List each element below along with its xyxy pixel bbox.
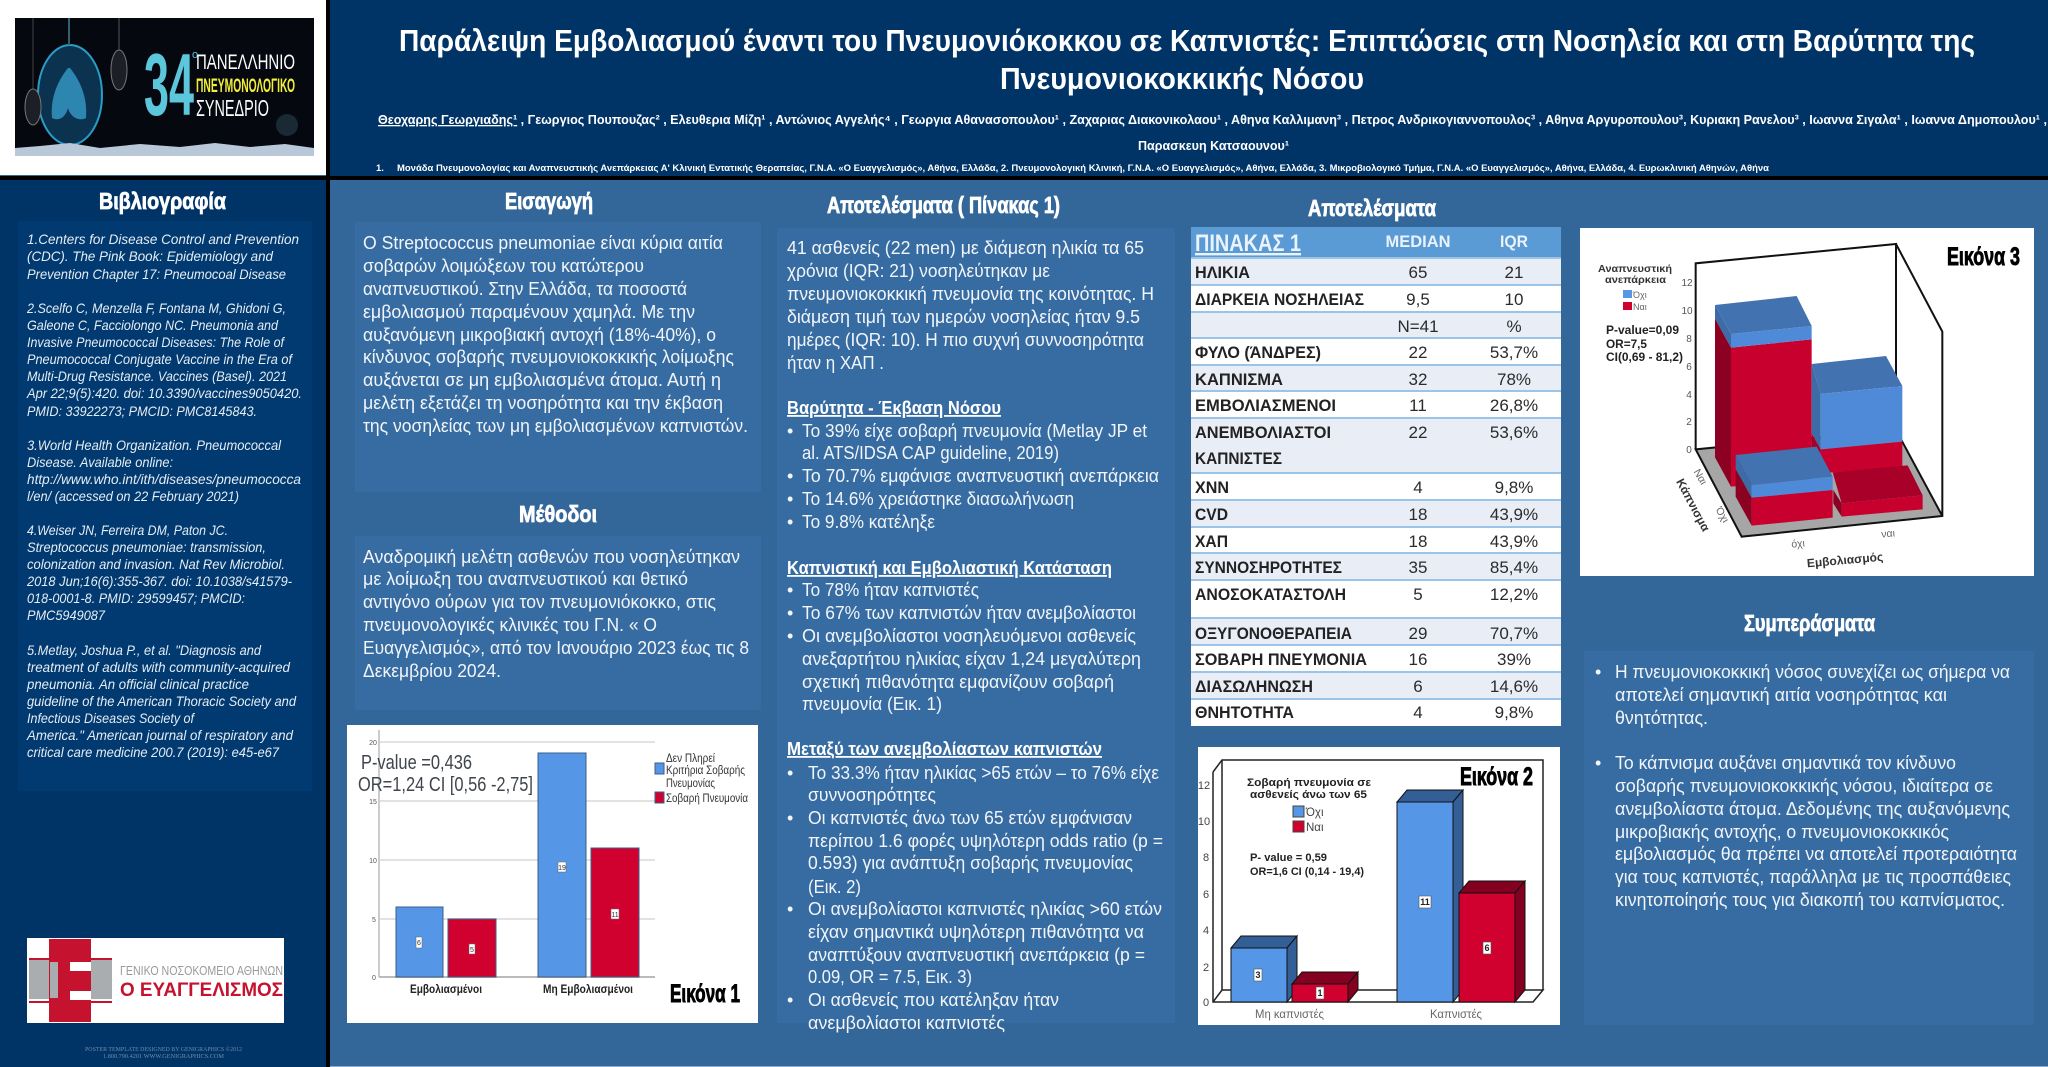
- chart: figure 1: [347, 725, 758, 1023]
- table row labels: ΑΝΕΜΒΟΛΙΑΣΤΟΙ: [1195, 423, 1331, 442]
- authors: [378, 112, 2047, 153]
- table row labels: ΧΝΝ: [1195, 478, 1229, 497]
- text: summary: διάμεση τιμή των ημερών νοσηλείας ήταν 9.5: [787, 307, 1140, 327]
- title: Πνευμονιοκοκκικής Νόσου: [1000, 61, 1364, 96]
- text: methods body: Αναδρομική μελέτη ασθενών που νοσηλεύτηκαν: [363, 547, 740, 567]
- text: references: Pneumococcal Conjugate Vaccine in the Era of: [27, 351, 294, 367]
- table row labels: ΟΞΥΓΟΝΟΘΕΡΑΠΕΙΑ: [1195, 624, 1352, 643]
- text: smoking and vaccination section: •: [787, 603, 793, 623]
- table median values: 22: [1409, 423, 1427, 442]
- table row labels: ΚΑΠΝΙΣΤΕΣ: [1195, 449, 1282, 468]
- text: references: colonization and invasion. Nat Rev Microbiol.: [27, 556, 285, 572]
- stats annotation: OR=1,24 CI [0,56 -2,75]: [358, 774, 533, 796]
- text: references: Galeone C, Facciolongo NC. Pneumonia and: [27, 317, 279, 333]
- text: summary: ήταν η ΧΑΠ .: [787, 353, 884, 373]
- heading: introduction: Εισαγωγή: [505, 188, 593, 214]
- text: unvaccinated smokers section: αναπτύξουν αναπνευστική ανεπάρκεια (p =: [808, 945, 1145, 965]
- text: smoking and vaccination section: ανεξαρτήτου ηλικίας είχαν 1,24 μεγαλύτερη: [802, 649, 1141, 669]
- stats annotation: [1250, 852, 1364, 878]
- stats annotation: P-value =0,436: [361, 752, 472, 774]
- chart: figure 1: 5: [372, 917, 376, 924]
- chart: figure 1: 11: [611, 912, 619, 919]
- text: smoking and vaccination section: πνευμονία (Εικ. 1): [802, 694, 942, 714]
- text: references: 2.Scelfo C, Menzella F, Fontana M, Ghidoni G,: [26, 300, 286, 316]
- text: unvaccinated smokers section: •: [787, 990, 793, 1010]
- footer credit: 1.800.790.4201 WWW.GENIGRAPHICS.COM: [103, 1053, 224, 1060]
- legend: ανεπάρκεια: [1605, 274, 1667, 286]
- text: unvaccinated smokers section: [787, 739, 1163, 1033]
- table row labels: ΗΛΙΚΙΑ: [1195, 263, 1250, 282]
- table iqr and percent values: 12,2%: [1490, 585, 1538, 604]
- text: introduction body: [363, 233, 748, 436]
- text: conclusions body: ανεμβολίαστα άτομα. Δεδομένης της αυξανόμενης: [1615, 799, 2010, 819]
- text: methods body: Ευαγγελισμός», από τον Ιανουάριο 2023 έως τις 8: [363, 638, 749, 658]
- text: conclusions body: θνητότητας.: [1615, 708, 1708, 728]
- table median values: [1397, 263, 1439, 722]
- table median values: 22: [1409, 343, 1427, 362]
- legend: [1293, 806, 1324, 834]
- 3d plot: [1696, 244, 1942, 537]
- text: introduction body: αυξανόμενη μικροβιακή αντοχή (18%-40%), ο: [363, 325, 716, 345]
- text: smoking and vaccination section: [787, 558, 1141, 714]
- panel: conclusions: [1584, 610, 2034, 1025]
- text: introduction body: κίνδυνος σοβαρής πνευμονιοκοκκικής λοίμωξης: [363, 347, 734, 367]
- legend: Σοβαρή Πνευμονία: [666, 791, 748, 805]
- footer credit: [85, 1046, 242, 1060]
- text: unvaccinated smokers section: •: [787, 808, 793, 828]
- title: [399, 23, 1975, 96]
- chart: figure 1: 15: [369, 799, 377, 806]
- text: severity section: •: [787, 421, 793, 441]
- conference logo: ΣΥΝΕΔΡΙΟ: [196, 95, 269, 121]
- table iqr and percent values: 10: [1505, 290, 1523, 309]
- stats annotation: P- value = 0,59: [1250, 852, 1327, 864]
- authors: Παρασκευη Κατσαουνου¹: [1138, 138, 1289, 153]
- text: references: Prevention Chapter 17: Pneumocoal Disease: [27, 266, 286, 282]
- conference logo: 34: [144, 35, 194, 134]
- text: smoking and vaccination section: Το 67% των καπνιστών ήταν ανεμβολίαστοι: [802, 603, 1136, 623]
- text: references: [26, 231, 302, 760]
- legend: Πνευμονίας: [666, 776, 715, 790]
- text: methods body: Δεκεμβρίου 2024.: [363, 661, 501, 681]
- chart: figure 3: 6: [1686, 362, 1692, 373]
- chart: figure 2: 1: [1317, 988, 1323, 998]
- table header: MEDIAN: [1386, 232, 1450, 251]
- chart: figure 3: [1580, 228, 2034, 576]
- table row labels: ΘΝΗΤΟΤΗΤΑ: [1195, 703, 1294, 722]
- text: references: PMC5949087: [27, 607, 106, 623]
- table median values: 4: [1413, 703, 1423, 722]
- table median values: 5: [1413, 585, 1423, 604]
- text: summary: πνευμονιοκοκκική πνευμονία της κοινότητας. Η: [787, 284, 1154, 304]
- figure label: Εικόνα 2: [1460, 763, 1533, 791]
- table median values: 65: [1409, 263, 1427, 282]
- text: references: Disease. Available online:: [27, 454, 173, 470]
- legend: Όχι: [1305, 807, 1324, 819]
- chart: figure 2: 12: [1198, 780, 1210, 792]
- table iqr and percent values: 39%: [1497, 650, 1531, 669]
- hospital logo: Ο ΕΥΑΓΓΕΛΙΣΜΟΣ: [120, 980, 283, 1001]
- table median values: 18: [1409, 505, 1427, 524]
- table row labels: ΑΝΟΣΟΚΑΤΑΣΤΟΛΗ: [1195, 585, 1346, 604]
- legend: Κριτήρια Σοβαρής: [666, 763, 745, 777]
- text: severity section: •: [787, 489, 793, 509]
- text: smoking and vaccination section: Οι ανεμβολίαστοι νοσηλευόμενοι ασθενείς: [802, 626, 1136, 646]
- table median values: 32: [1409, 370, 1427, 389]
- chart: figure 2: 3: [1255, 970, 1261, 980]
- category labels: [410, 982, 633, 996]
- text: unvaccinated smokers section: •: [787, 763, 793, 783]
- table median values: 35: [1409, 558, 1427, 577]
- category labels: Καπνιστές: [1430, 1007, 1482, 1021]
- category labels: [1255, 1007, 1482, 1021]
- affiliations: 1.: [376, 163, 384, 174]
- table header: IQR: [1500, 232, 1528, 251]
- chart: figure 2: 2: [1203, 962, 1209, 974]
- chart: figure 2: 0: [1203, 997, 1209, 1009]
- legend: Ναι: [1633, 302, 1647, 312]
- text: unvaccinated smokers section: ανεμβολίαστοι καπνιστές: [808, 1013, 1005, 1033]
- text: methods body: αντιγόνο ούρων για τον πνευμονιόκοκκο, στις: [363, 592, 716, 612]
- chart: figure 2: [1198, 747, 1560, 1025]
- table row labels: ΣΥΝΝΟΣΗΡΟΤΗΤΕΣ: [1195, 558, 1342, 577]
- table row labels: ΣΟΒΑΡΗ ΠΝΕΥΜΟΝΙΑ: [1195, 650, 1367, 669]
- text: introduction body: μελέτη εξετάζει τη νοσηρότητα και την έκβαση: [363, 393, 723, 413]
- chart: figure 1: 5: [470, 947, 474, 954]
- text: conclusions body: μικροβιακής αντοχής, ο πνευμονιοκοκκικός: [1615, 822, 1949, 842]
- text: introduction body: εμβολιασμού παραμένουν χαμηλά. Με την: [363, 302, 695, 322]
- text: unvaccinated smokers section: Οι καπνιστές άνω των 65 ετών εμφάνισαν: [808, 808, 1132, 828]
- text: smoking and vaccination section: Το 78% ήταν καπνιστές: [802, 580, 979, 600]
- table iqr and percent values: [1490, 263, 1538, 722]
- table median values: 16: [1409, 650, 1427, 669]
- axis labels: Εμβολιασμός: [1806, 550, 1884, 570]
- text: severity section: Βαρύτητα - Έκβαση Νόσου: [787, 398, 1001, 418]
- text: references: 5.Metlay, Joshua P., et al. "Diagnosis and: [27, 642, 262, 658]
- table iqr and percent values: 53,7%: [1490, 343, 1538, 362]
- chart: figure 3: 4: [1686, 390, 1692, 401]
- text: introduction body: σοβαρών λοιμώξεων του κατώτερου: [363, 256, 644, 276]
- text: severity section: al. ATS/IDSA CAP guideline, 2019): [802, 443, 1059, 463]
- heading: conclusions: Συμπεράσματα: [1744, 610, 1875, 636]
- text: references: treatment of adults with community-acquired: [27, 659, 291, 675]
- chart frame: [1213, 760, 1543, 1002]
- table median values: 4: [1413, 478, 1423, 497]
- table iqr and percent values: 70,7%: [1490, 624, 1538, 643]
- text: smoking and vaccination section: •: [787, 580, 793, 600]
- text: references: Streptococcus pneumoniae: transmission,: [27, 539, 266, 555]
- chart title: [1247, 777, 1372, 801]
- table iqr and percent values: 43,9%: [1490, 505, 1538, 524]
- table iqr and percent values: 9,8%: [1495, 703, 1533, 722]
- table median values: 11: [1409, 396, 1427, 415]
- legend: Ναι: [1306, 822, 1324, 834]
- text: references: Apr 22;9(5):420. doi: 10.3390/vaccines9050420.: [26, 385, 302, 401]
- text: references: pneumonia. An official clinical practice: [26, 676, 249, 692]
- text: introduction body: αναπνευστικού. Στην Ελλάδα, τα ποσοστά: [363, 279, 687, 299]
- chart: figure 1: 6: [417, 940, 421, 947]
- text: conclusions body: •: [1595, 753, 1601, 773]
- axis labels: Κάπνισμα: [1673, 476, 1713, 534]
- stats annotation: P-value=0,09: [1606, 323, 1679, 337]
- text: references: America." American journal of respiratory and: [26, 727, 294, 743]
- text: conclusions body: Το κάπνισμα αυξάνει σημαντικά τον κίνδυνο: [1615, 753, 1956, 773]
- panel: introduction: [355, 188, 761, 492]
- chart: figure 1: 19: [558, 865, 566, 872]
- text: summary: χρόνια (IQR: 21) νοσηλεύτηκαν με: [787, 261, 1050, 281]
- table iqr and percent values: 85,4%: [1490, 558, 1538, 577]
- panel: bibliography: [18, 188, 312, 791]
- text: references: guideline of the American Thoracic Society and: [27, 693, 297, 709]
- conference logo: ΠΑΝΕΛΛΗΝΙΟ: [196, 51, 295, 74]
- text: conclusions body: εμβολιασμός θα πρέπει να αποτελεί προτεραιότητα: [1615, 844, 2017, 864]
- text: introduction body: της νοσηλείας των μη εμβολιασμένων καπνιστών.: [363, 416, 748, 436]
- chart: figure 1: 0: [372, 975, 376, 982]
- conference logo: ο: [192, 49, 198, 61]
- table header: [1195, 230, 1528, 257]
- text: unvaccinated smokers section: περίπου 1.6 φορές υψηλότερη odds ratio (p =: [808, 831, 1163, 851]
- category labels: Μη Εμβολιασμένοι: [543, 982, 633, 996]
- text: references: 1.Centers for Disease Control and Prevention: [27, 231, 299, 247]
- table row labels: [1195, 263, 1367, 722]
- affiliations: Μονάδα Πνευμονολογίας και Αναπνευστικής Ανεπάρκειας Α' Κλινική Εντατικής Θεραπείας, Γ.Ν.Α. «Ο Ευαγγελισμός», Αθήνα, Ελλάδα, 2. Πνευμονολογική Κλινική, Γ.Ν.Α. «Ο Ευαγγελισμός», Αθήνα, Ελλάδα, 3. Μικροβιολογικό Τμήμα, Γ.Ν.Α. «Ο Ευαγγελισμός», Αθήνα, Ελλάδα, 4. Ευρωκλινική Αθηνών, Αθήνα: [397, 163, 1769, 174]
- legend: Όχι: [1632, 290, 1647, 300]
- table row labels: CVD: [1195, 505, 1228, 524]
- chart: figure 2: 4: [1203, 925, 1209, 937]
- legend: [655, 751, 748, 805]
- chart: figure 3: 2: [1686, 417, 1692, 428]
- text: conclusions body: •: [1595, 662, 1601, 682]
- text: severity section: Το 14.6% χρειάστηκε διασωλήνωση: [802, 489, 1074, 509]
- table median values: 6: [1413, 677, 1423, 696]
- text: unvaccinated smokers section: είχαν σημαντικά υψηλότερη πιθανότητα να: [808, 922, 1144, 942]
- authors: Θεοχαρης Γεωργιαδης¹ , Γεωργιος Πουπουζας² , Ελευθερια Μίζη¹ , Αντώνιος Αγγελής⁴ , Γεωργια Αθανασοπουλου¹ , Ζαχαριας Διακονικολαου¹ , Αθηνα Καλλιμανη³ , Πετρος Ανδρικογιαννοπουλος³ , Αθηνα Αργυροπουλου³, Κυριακη Ρανελου³ , Ιωαννα Σιγαλα¹ , Ιωαννα Δημοπουλου¹ ,: [378, 112, 2047, 127]
- chart: figure 2: 6: [1484, 943, 1490, 953]
- text: severity section: Το 70.7% εμφάνισε αναπνευστική ανεπάρκεια: [802, 466, 1159, 486]
- table row labels: ΔΙΑΡΚΕΙΑ ΝΟΣΗΛΕΙΑΣ: [1195, 290, 1364, 309]
- stats annotation: CI(0,69 - 81,2): [1606, 350, 1683, 364]
- table iqr and percent values: 53,6%: [1490, 423, 1538, 442]
- text: unvaccinated smokers section: Οι ανεμβολίαστοι καπνιστές ηλικίας >60 ετών: [808, 899, 1162, 919]
- text: severity section: [787, 398, 1159, 532]
- category labels: Μη καπνιστές: [1255, 1007, 1324, 1021]
- text: introduction body: Ο Streptococcus pneumoniae είναι κύρια αιτία: [363, 233, 723, 253]
- text: summary: ημέρες (IQR: 10). Η πιο συχνή συννοσηρότητα: [787, 330, 1144, 350]
- chart: figure 1: 10: [369, 858, 377, 865]
- table row labels: ΚΑΠΝΙΣΜΑ: [1195, 370, 1283, 389]
- stats annotation: OR=7,5: [1606, 337, 1647, 351]
- stats annotation: [358, 752, 533, 796]
- text: references: http://www.who.int/ith/diseases/pneumococca: [27, 471, 301, 487]
- text: unvaccinated smokers section: Οι ασθενείς που κατέληξαν ήταν: [808, 990, 1059, 1010]
- text: references: Infectious Diseases Society of: [27, 710, 196, 726]
- bars: [396, 753, 639, 977]
- text: unvaccinated smokers section: 0.09, OR = 7.5, Εικ. 3): [808, 967, 972, 987]
- chart title: ασθενείς άνω των 65: [1250, 789, 1367, 801]
- table row labels: ΕΜΒΟΛΙΑΣΜΕΝΟΙ: [1195, 396, 1336, 415]
- table iqr and percent values: %: [1506, 317, 1522, 336]
- panel: methods: [355, 501, 761, 710]
- footer credit: POSTER TEMPLATE DESIGNED BY GENIGRAPHICS ©2012: [85, 1046, 242, 1053]
- table median values: 18: [1409, 532, 1427, 551]
- text: conclusions body: για τους καπνιστές, παράλληλα με τις προσπάθειες: [1615, 867, 2011, 887]
- text: conclusions body: κινητοποίησής τους για διακοπή του καπνίσματος.: [1615, 890, 2005, 910]
- conference logo: [15, 18, 314, 156]
- text: conclusions body: [1595, 662, 2017, 910]
- chart: figure 3: 10: [1681, 306, 1693, 317]
- text: references: 3.World Health Organization. Pneumococcal: [27, 437, 282, 453]
- text: unvaccinated smokers section: (Εικ. 2): [808, 877, 861, 897]
- figure label: Εικόνα 1: [670, 980, 740, 1008]
- text: references: 018-0001-8. PMID: 29599457; PMCID:: [27, 590, 245, 606]
- chart: figure 2: 10: [1198, 816, 1210, 828]
- table row labels: ΦΥΛΟ (ΆΝΔΡΕΣ): [1195, 343, 1321, 362]
- stats annotation: OR=1,6 CI (0,14 - 19,4): [1250, 866, 1364, 878]
- heading: results table 1: Αποτελέσματα ( Πίνακας 1): [827, 192, 1060, 218]
- table 1: [1191, 227, 1561, 726]
- table iqr and percent values: 43,9%: [1490, 532, 1538, 551]
- text: introduction body: αυξάνεται σε μη εμβολιασμένα άτομα. Αυτή η: [363, 370, 721, 390]
- text: references: l/en/ (accessed on 22 February 2021): [27, 488, 239, 504]
- text: summary: [787, 238, 1154, 373]
- 3d bars: [1231, 790, 1525, 1002]
- text: unvaccinated smokers section: Το 33.3% ήταν ηλικίας >65 ετών – το 76% είχε: [808, 763, 1159, 783]
- hospital logo: ΓΕΝΙΚΟ ΝΟΣΟΚΟΜΕΙΟ ΑΘΗΝΩΝ: [120, 963, 283, 978]
- table iqr and percent values: 21: [1505, 263, 1523, 282]
- text: references: 4.Weiser JN, Ferreira DM, Paton JC.: [27, 522, 228, 538]
- chart: figure 2: 6: [1203, 889, 1209, 901]
- table header: ΠΙΝΑΚΑΣ 1: [1195, 230, 1301, 257]
- text: references: (CDC). The Pink Book: Epidemiology and: [27, 248, 274, 264]
- text: smoking and vaccination section: •: [787, 626, 793, 646]
- text: conclusions body: αποτελεί σημαντική αιτία νοσηρότητας και: [1615, 685, 1947, 705]
- table row labels: ΧΑΠ: [1195, 532, 1228, 551]
- figure label: Εικόνα 3: [1947, 243, 2020, 271]
- heading: bibliography: Βιβλιογραφία: [99, 188, 226, 214]
- text: references: PMID: 33922273; PMCID: PMC8145843.: [27, 403, 257, 419]
- category labels: Εμβολιασμένοι: [410, 982, 482, 996]
- text: references: 2018 Jun;16(6):355-367. doi: 10.1038/s41579-: [26, 573, 292, 589]
- heading: results: Αποτελέσματα: [1308, 195, 1436, 221]
- table iqr and percent values: 78%: [1497, 370, 1531, 389]
- stats annotation: [1606, 323, 1683, 364]
- text: unvaccinated smokers section: συννοσηρότητες: [808, 785, 936, 805]
- table iqr and percent values: 9,8%: [1495, 478, 1533, 497]
- chart: figure 2: 8: [1203, 852, 1209, 864]
- text: severity section: Το 9.8% κατέληξε: [802, 512, 935, 532]
- legend: Δεν Πληρεί: [666, 751, 715, 765]
- axis labels: Όχι: [1712, 504, 1732, 525]
- chart title: Σοβαρή πνευμονία σε: [1247, 777, 1372, 789]
- text: references: Invasive Pneumococcal Diseases: The Role of: [27, 334, 286, 350]
- text: conclusions body: σοβαρής πνευμονιοκοκκικής νόσου, ιδιαίτερα σε: [1615, 776, 1993, 796]
- text: unvaccinated smokers section: Μεταξύ των ανεμβολίαστων καπνιστών: [787, 739, 1102, 760]
- text: methods body: [363, 547, 749, 681]
- table median values: 9,5: [1406, 290, 1430, 309]
- text: references: Multi-Drug Resistance. Vaccines (Basel). 2021: [27, 368, 287, 384]
- text: unvaccinated smokers section: •: [787, 899, 793, 919]
- text: severity section: •: [787, 512, 793, 532]
- hospital logo: [27, 938, 284, 1023]
- text: methods body: με λοίμωξη του αναπνευστικού και θετικό: [363, 569, 688, 589]
- heading: methods: Μέθοδοι: [519, 501, 597, 527]
- legend: Αναπνευστική: [1598, 263, 1672, 275]
- chart: figure 2: 11: [1420, 897, 1430, 907]
- panel: results text: [777, 192, 1175, 1033]
- conference logo: ΠΝΕΥΜΟΝΟΛΟΓΙΚΟ: [196, 76, 295, 97]
- text: severity section: Το 39% είχε σοβαρή πνευμονία (Metlay JP et: [802, 421, 1147, 441]
- text: conclusions body: Η πνευμονιοκοκκική νόσος συνεχίζει ως σήμερα να: [1615, 662, 2010, 682]
- table row labels: ΔΙΑΣΩΛΗΝΩΣΗ: [1195, 677, 1313, 696]
- chart: figure 3: 8: [1686, 334, 1692, 345]
- table median values: 29: [1409, 624, 1427, 643]
- chart: figure 3: 12: [1681, 278, 1693, 289]
- chart: figure 1: 20: [369, 740, 377, 747]
- text: severity section: •: [787, 466, 793, 486]
- text: methods body: πνευμονολογικές κλινικές του Γ.Ν. « Ο: [363, 615, 657, 635]
- axis labels: Ναι: [1691, 467, 1710, 487]
- legend: [1598, 263, 1672, 312]
- text: smoking and vaccination section: Καπνιστική και Εμβολιαστική Κατάσταση: [787, 558, 1112, 578]
- chart: figure 3: 0: [1686, 445, 1692, 456]
- table iqr and percent values: 14,6%: [1490, 677, 1538, 696]
- table iqr and percent values: 26,8%: [1490, 396, 1538, 415]
- table median values: N=41: [1397, 317, 1439, 336]
- axis labels: ναι: [1881, 527, 1896, 541]
- text: summary: 41 ασθενείς (22 men) με διάμεση ηλικία τα 65: [787, 238, 1144, 258]
- text: unvaccinated smokers section: 0.593) για ανάπτυξη σοβαρής πνευμονίας: [808, 853, 1133, 873]
- text: references: critical care medicine 200.7 (2019): e45-e67: [27, 744, 280, 760]
- text: smoking and vaccination section: σχετική πιθανότητα εμφανίζουν σοβαρή: [802, 672, 1114, 692]
- axis labels: [1673, 467, 1896, 570]
- axis labels: όχι: [1791, 537, 1806, 551]
